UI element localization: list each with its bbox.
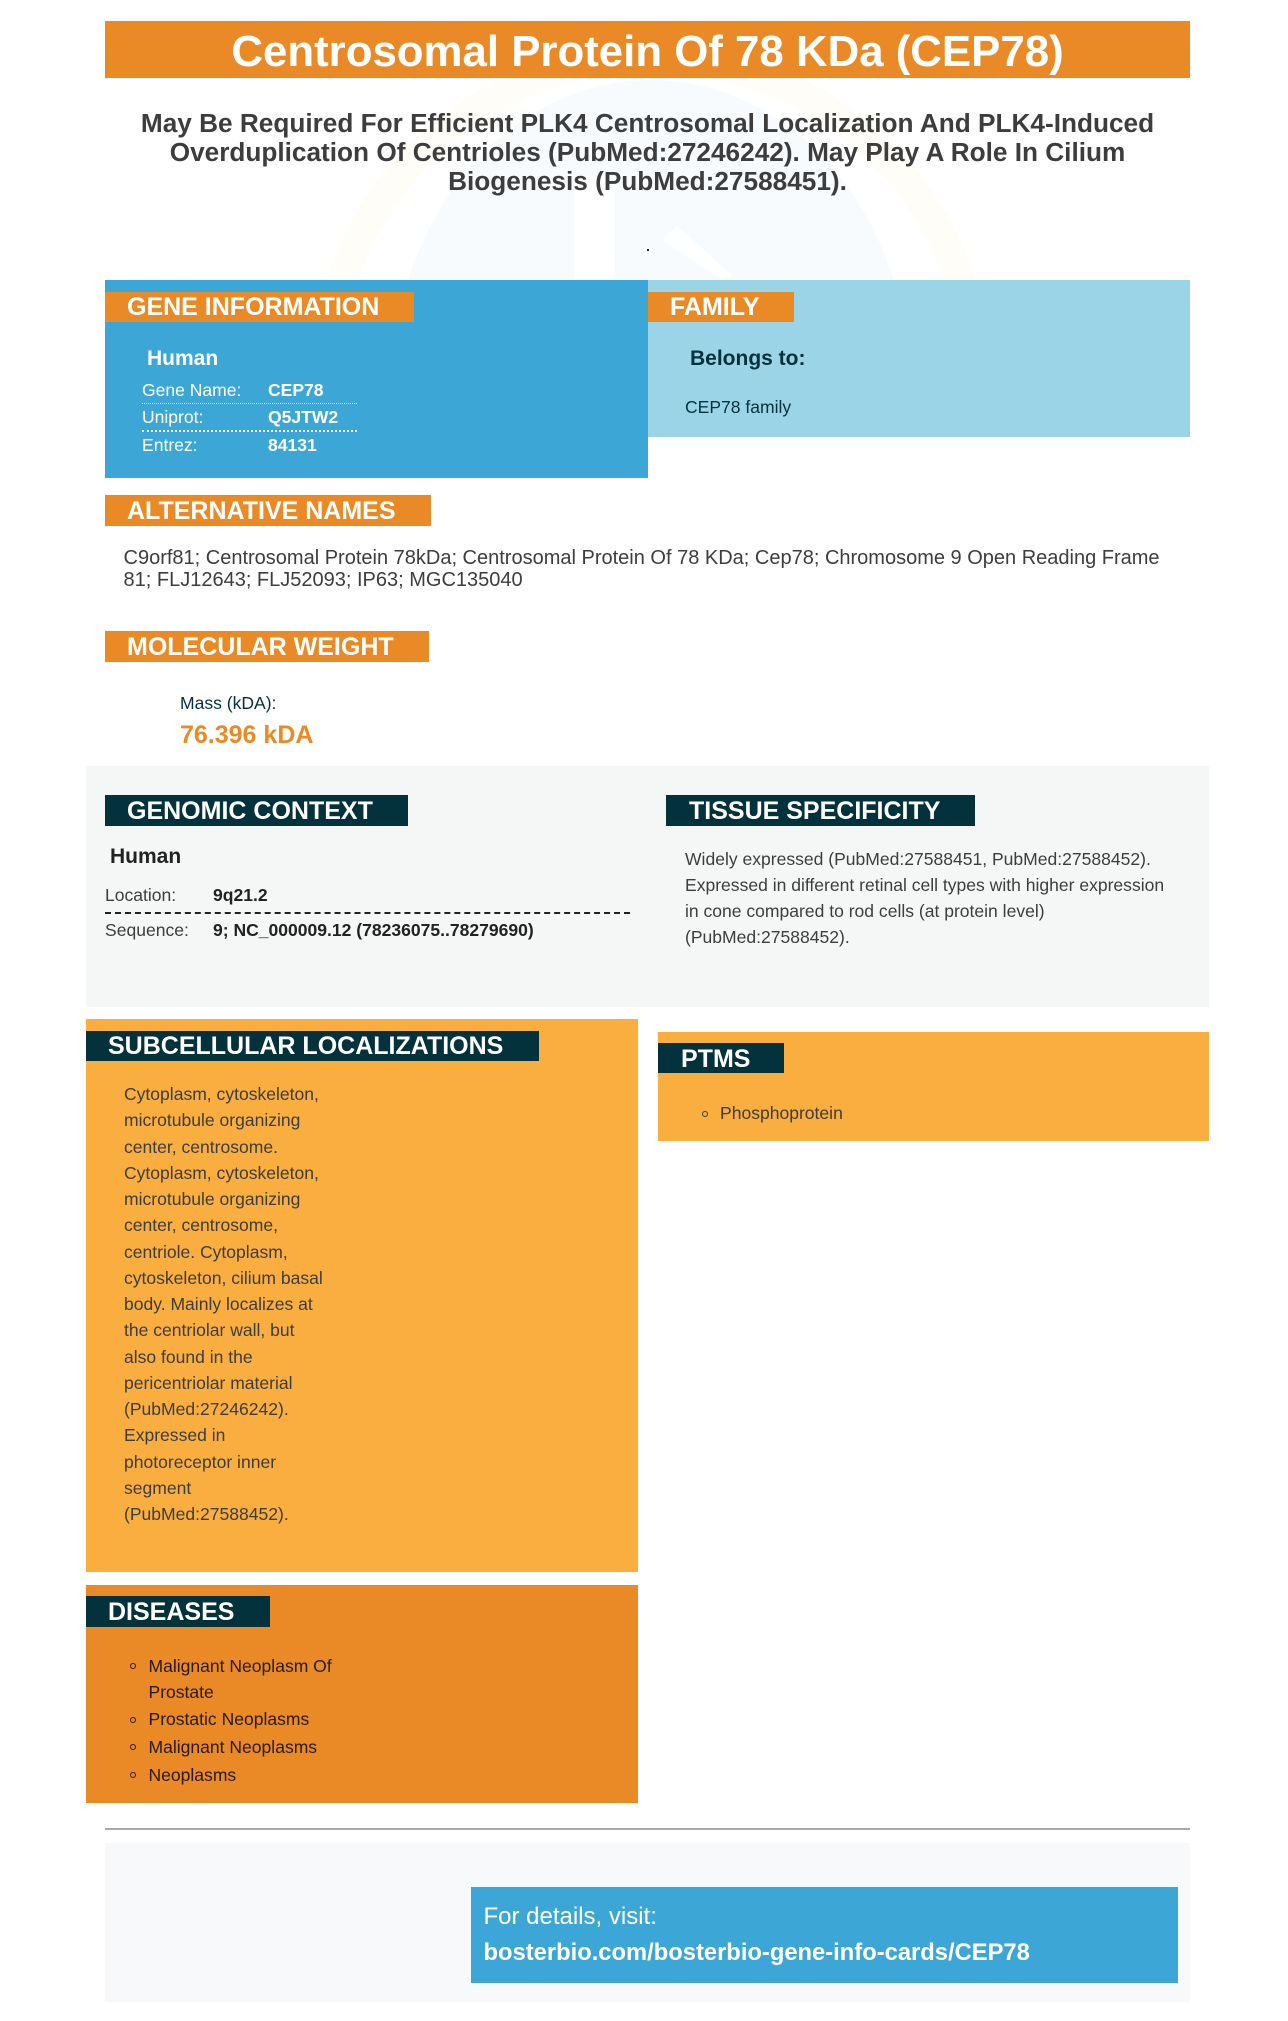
- heading: tissue specificity: TISSUE SPECIFICITY: [689, 797, 940, 825]
- subcellular localization text: center, centrosome,: [124, 1215, 278, 1235]
- panel: subcellular localizations: [86, 1019, 638, 1572]
- callout url: bosterbio.com/bosterbio-gene-info-cards/CEP78: [484, 1939, 1030, 1966]
- entrez row: 84131: [268, 435, 317, 455]
- uniprot row: Q5JTW2: [268, 407, 338, 427]
- subcellular localization text: segment: [124, 1478, 191, 1498]
- panel: gene information: [105, 280, 648, 478]
- diseases bullet list: Malignant Neoplasms: [148, 1737, 317, 1757]
- callout label: For details, visit:: [484, 1903, 657, 1930]
- subcellular localization text: photoreceptor inner: [124, 1452, 276, 1472]
- species label: Human: [110, 845, 181, 868]
- callout: details link: [471, 1887, 1178, 1983]
- heading: molecular weight: MOLECULAR WEIGHT: [127, 633, 394, 661]
- gene name row: Gene Name:: [142, 380, 241, 400]
- tissue specificity text: Expressed in different retinal cell types with higher expression: [685, 875, 1164, 895]
- panel: genomic context and tissue specificity: [86, 766, 1209, 1007]
- subcellular localization text: microtubule organizing: [124, 1110, 300, 1130]
- diseases bullet list: [148, 1656, 332, 1785]
- subtitle description: Overduplication Of Centrioles (PubMed:27246242). May Play A Role In Cilium: [170, 137, 1125, 167]
- ptm item: Phosphoprotein: [720, 1103, 843, 1123]
- entrez row: [142, 435, 317, 455]
- heading: genomic context: GENOMIC CONTEXT: [127, 797, 373, 825]
- location row: 9q21.2: [213, 885, 268, 905]
- diseases bullet markers: [130, 1663, 136, 1778]
- heading: alternative names: ALTERNATIVE NAMES: [127, 497, 396, 525]
- subcellular localization text: microtubule organizing: [124, 1189, 300, 1209]
- subcellular localization text: (PubMed:27246242).: [124, 1399, 289, 1419]
- tissue specificity text: [685, 849, 1164, 947]
- sequence row: 9; NC_000009.12 (78236075..78279690): [213, 920, 534, 940]
- diseases bullet list: Malignant Neoplasm Of: [148, 1656, 332, 1676]
- subcellular localization text: also found in the: [124, 1346, 253, 1366]
- mass label: Mass (kDA):: [180, 693, 276, 713]
- family name: CEP78 family: [685, 397, 791, 417]
- subcellular localization text: the centriolar wall, but: [124, 1320, 295, 1340]
- heading: ptms: [658, 1043, 784, 1073]
- diseases bullet list: Prostate: [148, 1682, 214, 1702]
- mass value: 76.396 kDA: [180, 721, 313, 749]
- panel: diseases: [86, 1585, 638, 1803]
- subcellular localization text: body. Mainly localizes at: [124, 1294, 313, 1314]
- subcellular localization text: Cytoplasm, cytoskeleton,: [124, 1084, 319, 1104]
- heading: family: [648, 292, 794, 322]
- background watermark logo: [0, 0, 1288, 280]
- subcellular localization text: (PubMed:27588452).: [124, 1504, 289, 1524]
- tissue specificity text: Widely expressed (PubMed:27588451, PubMed:27588452).: [685, 849, 1151, 869]
- heading: family: FAMILY: [670, 293, 759, 321]
- diseases bullet list: Prostatic Neoplasms: [148, 1709, 309, 1729]
- title banner: [105, 21, 1190, 78]
- tissue specificity text: (PubMed:27588452).: [685, 927, 850, 947]
- heading: gene information: GENE INFORMATION: [127, 293, 379, 321]
- panel: family: [648, 280, 1190, 437]
- species label: Human: [147, 347, 218, 370]
- footer divider: [105, 1828, 1190, 1830]
- subcellular localization text: cytoskeleton, cilium basal: [124, 1268, 323, 1288]
- alternative names text: C9orf81; Centrosomal Protein 78kDa; Centrosomal Protein Of 78 KDa; Cep78; Chromosome 9 Open Reading Frame: [124, 547, 1160, 569]
- alternative names text: 81; FLJ12643; FLJ52093; IP63; MGC135040: [124, 569, 523, 591]
- subtitle description: [141, 108, 1154, 196]
- gene name row: [142, 377, 357, 404]
- subcellular localization text: Expressed in: [124, 1425, 225, 1445]
- subcellular localization text: [124, 1084, 323, 1524]
- title banner: Centrosomal Protein Of 78 KDa (CEP78): [231, 27, 1064, 76]
- subcellular localization text: pericentriolar material: [124, 1373, 293, 1393]
- heading: subcellular localizations: SUBCELLULAR LOCALIZATIONS: [108, 1032, 503, 1060]
- uniprot row: Uniprot:: [142, 407, 203, 427]
- alternative names text: [124, 547, 1160, 591]
- small dot: [647, 249, 649, 251]
- heading: diseases: [86, 1596, 270, 1627]
- sequence row: Sequence:: [105, 920, 189, 940]
- tissue specificity text: in cone compared to rod cells (at protein level): [685, 901, 1045, 921]
- ptm bullet marker: [702, 1111, 708, 1117]
- location row: Location:: [105, 885, 176, 905]
- subtitle description: Biogenesis (PubMed:27588451).: [448, 166, 847, 196]
- heading: diseases: DISEASES: [108, 1598, 234, 1626]
- subtitle description: May Be Required For Efficient PLK4 Centrosomal Localization And PLK4-Induced: [141, 108, 1154, 138]
- uniprot row: [142, 404, 357, 432]
- panel: ptms: [658, 1032, 1209, 1141]
- gene name row: CEP78: [268, 380, 324, 400]
- subcellular localization text: center, centrosome.: [124, 1136, 278, 1156]
- subcellular localization text: Cytoplasm, cytoskeleton,: [124, 1163, 319, 1183]
- entrez row: Entrez:: [142, 435, 198, 455]
- heading: ptms: PTMS: [681, 1045, 750, 1073]
- subcellular localization text: centriole. Cytoplasm,: [124, 1242, 288, 1262]
- panel: footer: [105, 1843, 1190, 2002]
- diseases bullet list: Neoplasms: [148, 1765, 236, 1785]
- belongs to label: Belongs to:: [690, 347, 806, 370]
- location row: [105, 881, 630, 914]
